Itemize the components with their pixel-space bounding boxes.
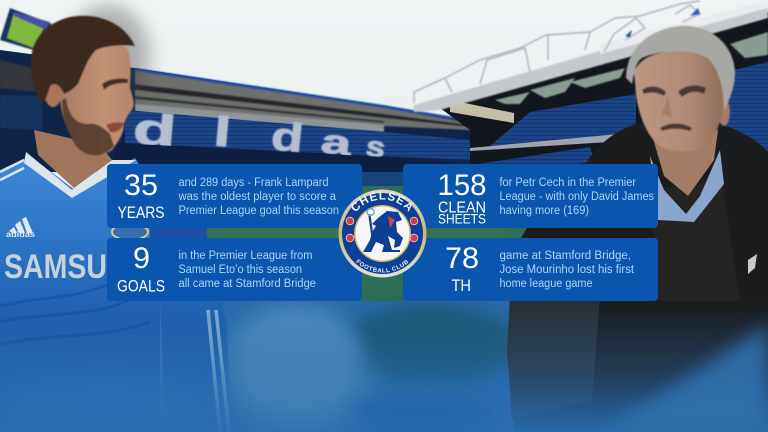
seat lettering adidas: d (131, 104, 178, 157)
roof skylights (495, 32, 768, 104)
right stadium stand (414, 0, 768, 172)
collar (24, 152, 136, 198)
number 158 clean sheets: 158 (438, 169, 486, 202)
number 35 years (118, 169, 164, 222)
fog over lower area (0, 302, 768, 432)
description: in the Premier League from (178, 250, 312, 262)
description: Jose Mourinho lost his first (500, 264, 635, 276)
description: League - with only David James (500, 191, 654, 203)
description: game at Stamford Bridge, (500, 250, 631, 262)
description (500, 177, 654, 217)
seat lettering adidas: s (364, 130, 387, 164)
adidas logo: adidas (6, 230, 36, 239)
brows and eyes (642, 85, 706, 97)
crest text: CHELSEA (352, 192, 412, 212)
neck (652, 130, 718, 196)
shirt fold shadows (0, 285, 150, 345)
sweater (652, 180, 740, 301)
beige wall (450, 100, 514, 123)
description: Premier League goal this season (178, 205, 339, 217)
face (634, 50, 724, 152)
number 9 goals (117, 242, 165, 296)
head (31, 16, 135, 155)
fog: right side (600, 325, 768, 432)
upper seats (490, 94, 636, 146)
description (500, 250, 635, 290)
sleeve shading (160, 300, 172, 432)
club crest on shirt (112, 224, 148, 240)
head skin (60, 43, 134, 155)
number 9 goals: GOALS (117, 276, 165, 296)
shoulder white stripes (0, 160, 24, 180)
crest lion (363, 208, 403, 252)
pale haze (230, 305, 360, 405)
ear (718, 98, 730, 126)
jacket zip tag (748, 254, 757, 274)
number 158 clean sheets: CLEAN (438, 200, 486, 216)
Chelsea crest badge: FOOTBALL CLUB (356, 259, 408, 272)
teal haze (340, 305, 520, 385)
description (178, 250, 316, 290)
adidas logo (6, 217, 36, 239)
nose shadow (662, 96, 672, 118)
number 158 clean sheets (438, 169, 486, 226)
mouth (106, 122, 124, 132)
number 9 goals: 9 (133, 242, 150, 275)
description: Samuel Eto’o this season (178, 264, 302, 276)
jacket (507, 122, 768, 432)
hair (626, 26, 735, 110)
player: Eden Hazard (0, 16, 232, 432)
panel: Cech stat (403, 164, 658, 228)
description: for Petr Cech in the Premier (500, 177, 636, 189)
ear (44, 75, 62, 107)
fog: centre cloud (230, 345, 370, 425)
stand seats (125, 110, 470, 160)
beard (62, 98, 114, 155)
number 78th: TH (452, 276, 471, 295)
sponsor text SAMSUNG: SAMSU (4, 248, 107, 286)
head (626, 26, 735, 152)
seat lettering adidas (131, 104, 387, 164)
stand roof underside (0, 60, 500, 132)
description: all came at Stamford Bridge (178, 278, 316, 290)
fog: bottom-centre (350, 392, 490, 432)
crest roses (346, 217, 418, 242)
number 78th: 78 (445, 242, 479, 275)
seat lettering adidas: a (319, 122, 355, 164)
number 35 years: 35 (124, 169, 158, 202)
shirt stripes on arm (208, 310, 229, 432)
panel: Eto'o stat (107, 238, 362, 301)
description: and 289 days - Frank Lampard (178, 177, 328, 189)
left stadium stand (0, 50, 520, 172)
brow and eye (102, 79, 128, 90)
panel: Lampard stat (107, 164, 362, 228)
grass and lower background (160, 172, 530, 432)
head shadow halo (66, 5, 150, 105)
number 78th (445, 242, 479, 295)
mouth (660, 124, 692, 131)
panel: Mourinho stat (403, 238, 658, 301)
stand interior (440, 12, 768, 172)
neck (34, 130, 112, 188)
player: Jose Mourinho (507, 26, 768, 432)
number 35 years: YEARS (118, 203, 164, 222)
sleeve dark fold (150, 228, 207, 238)
Chelsea crest badge (338, 190, 426, 278)
description (178, 177, 339, 217)
number 158 clean sheets: SHEETS (438, 210, 486, 226)
jacket mid tone (507, 296, 600, 420)
description: home league game (500, 278, 592, 290)
seat lettering adidas: d (269, 114, 305, 161)
fog: lower-left (0, 380, 220, 430)
description: having more (169) (500, 205, 589, 217)
shirt and torso (0, 156, 232, 432)
white roof truss (414, 0, 768, 112)
description: was the oldest player to score a (178, 191, 337, 203)
scoreboard (0, 8, 52, 52)
hair (31, 16, 135, 104)
shirt collar (650, 150, 724, 222)
